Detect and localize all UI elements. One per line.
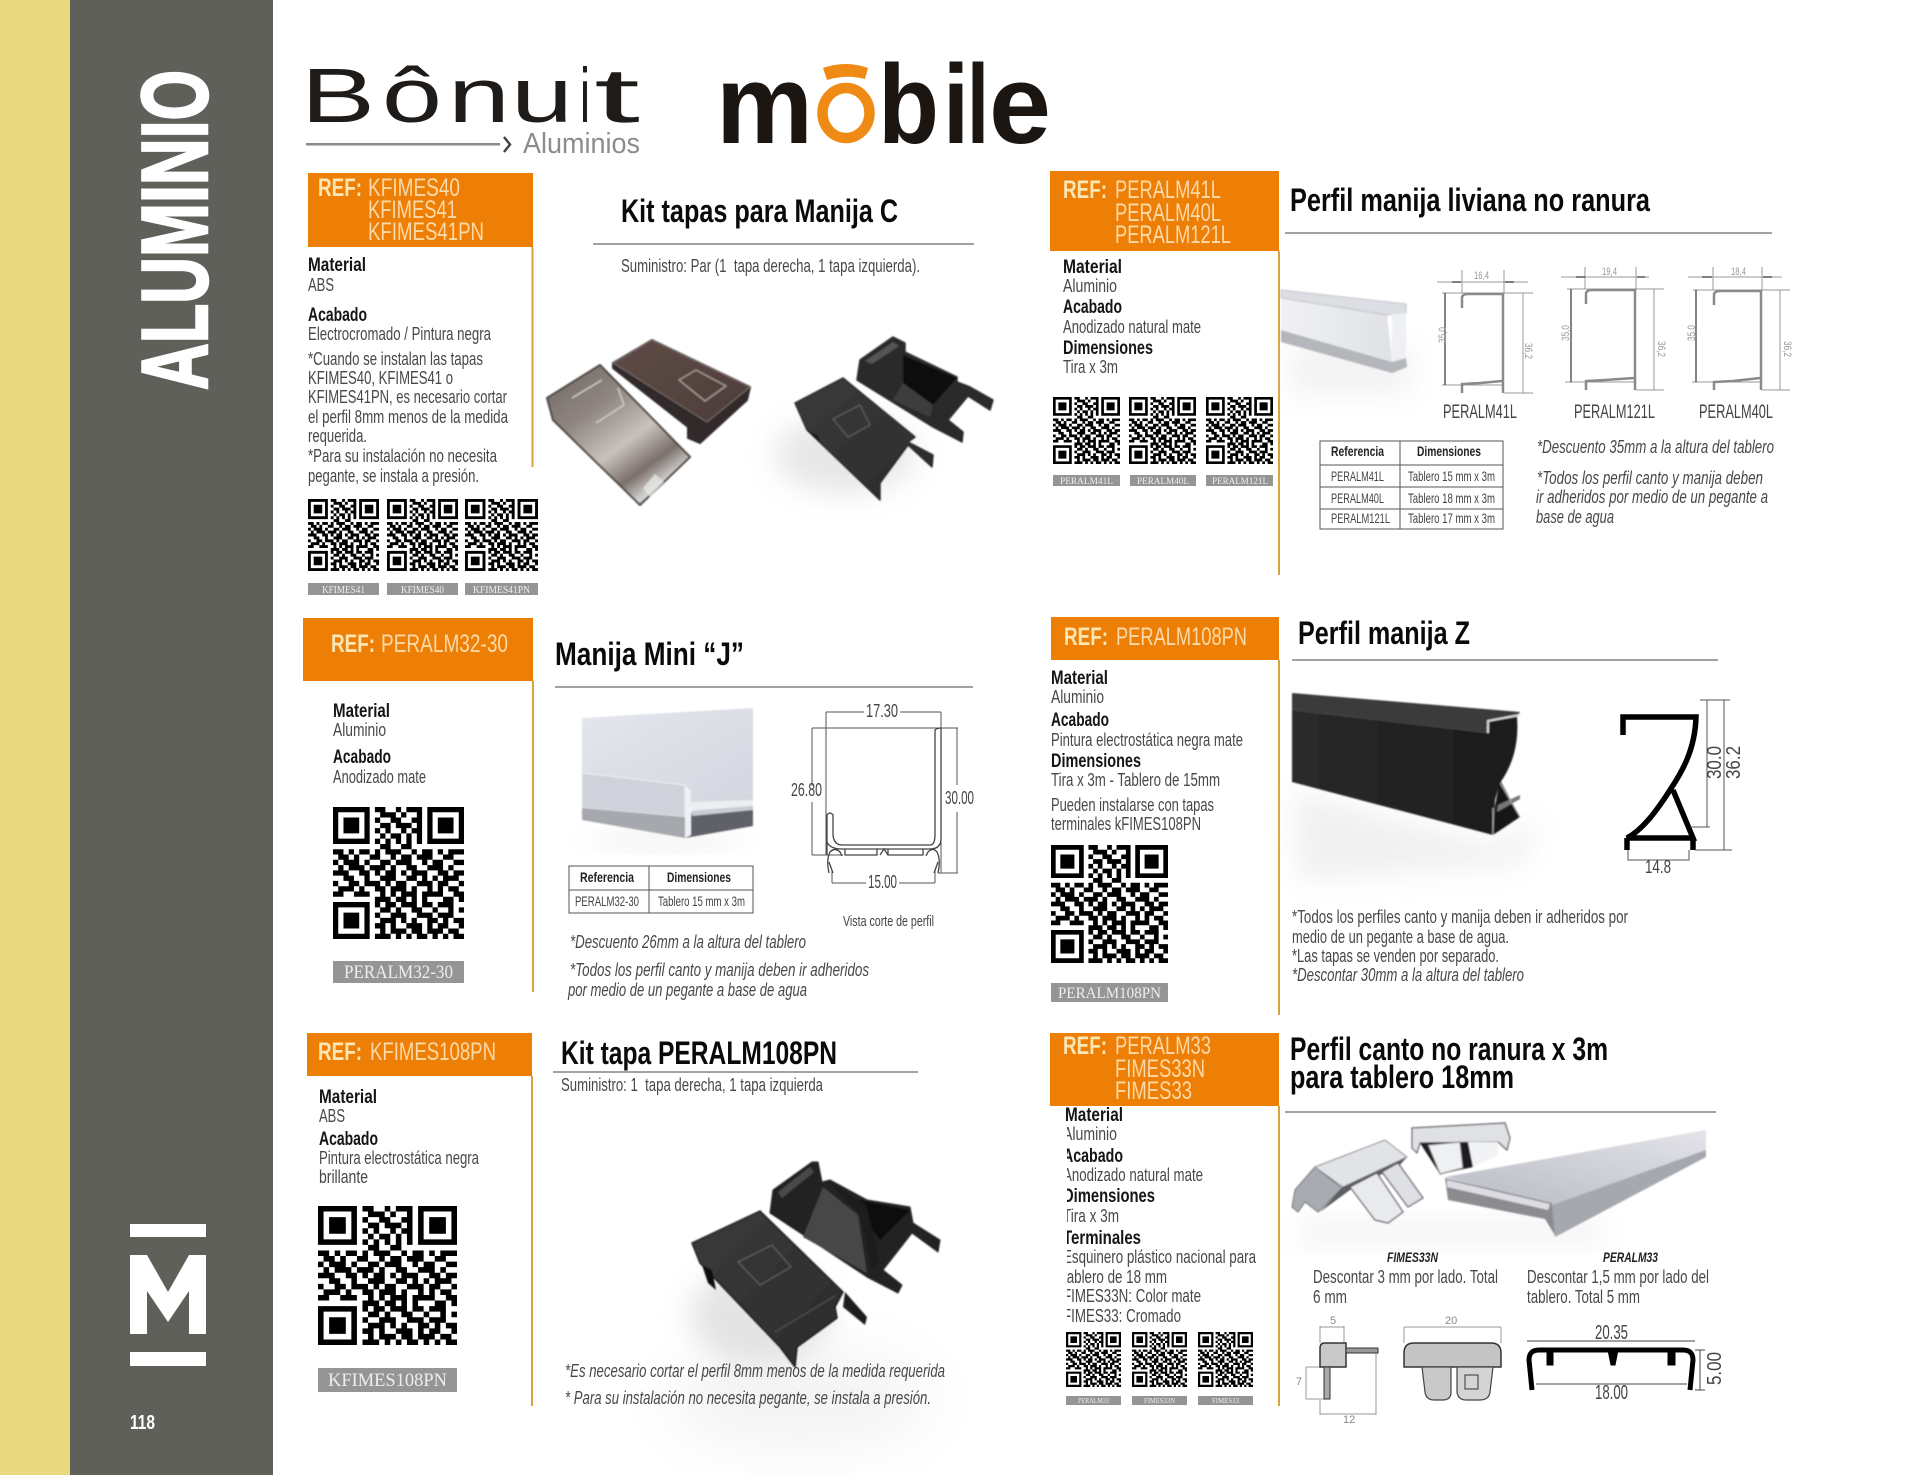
specifications: FIMES33: Cromado [1063, 1306, 1181, 1326]
installation notes: *Descuento 35mm a la altura del tablero [1537, 437, 1774, 457]
dimensions table: Dimensiones [667, 869, 731, 885]
supply note: Suministro: 1 tapa derecha, 1 tapa izquierda [561, 1075, 824, 1095]
terminal drawings: 12 [1343, 1414, 1355, 1426]
QR codes: PERALM33 [1078, 1397, 1109, 1405]
strip section drawing: 20.35 [1595, 1322, 1628, 1344]
title: para tablero 18mm [1290, 1059, 1514, 1095]
Z section drawing: 30.0 [1704, 746, 1726, 779]
title: Manija Mini “J” [555, 636, 744, 672]
specifications: *Para su instalación no necesita [308, 446, 498, 466]
terminal captions: Descontar 1,5 mm por lado del [1527, 1267, 1709, 1287]
installation notes: *Todos los perfiles canto y manija deben ir adheridos por [1292, 907, 1628, 927]
title: Kit tapas para Manija C [621, 193, 898, 229]
dimensions table: Dimensiones [1417, 443, 1481, 459]
product photo: black Z profile [1292, 693, 1540, 880]
specifications: terminales kFIMES108PN [1051, 814, 1201, 834]
reference header [1050, 1032, 1279, 1106]
panel: Kit tapas para Manija C [308, 173, 993, 596]
reference header: REF: [1063, 176, 1107, 204]
terminal drawings: 5 [1330, 1315, 1336, 1327]
specifications: KFIMES41PN, es necesario cortar [308, 387, 507, 407]
specifications: Terminales [1063, 1228, 1141, 1249]
reference header [1051, 617, 1279, 660]
panel: Manija Mini J [303, 618, 974, 1000]
installation notes: *Las tapas se venden por separado. [1292, 946, 1499, 966]
installation notes: *Descontar 30mm a la altura del tablero [1292, 965, 1524, 985]
specifications: *Cuando se instalan las tapas [308, 349, 483, 369]
dimensions table: Tablero 15 mm x 3m [1408, 468, 1495, 484]
specifications: FIMES33N: Color mate [1063, 1286, 1201, 1306]
dimensions table: PERALM40L [1331, 490, 1384, 506]
profile drawings: 36,2 [1781, 341, 1793, 357]
section drawing [791, 701, 974, 930]
profile drawings: 35,0 [1437, 327, 1449, 343]
QR codes: KFIMES40 [401, 585, 444, 596]
specifications: Dimensiones [1063, 1186, 1155, 1207]
dimensions table [1320, 441, 1503, 529]
strip section drawing [1527, 1322, 1726, 1404]
reference header: KFIMES41PN [368, 218, 484, 246]
logo: mobile [716, 42, 1051, 167]
installation notes: *Todos los perfil canto y manija deben ir adheridos [570, 960, 869, 980]
specifications: Material [333, 701, 390, 722]
specifications: Acabado [1051, 710, 1109, 731]
title [1290, 1031, 1608, 1095]
profile drawings: 18,4 [1731, 266, 1746, 278]
specifications: Acabado [319, 1129, 378, 1150]
specifications: Pintura electrostática negra mate [1051, 730, 1243, 750]
dimensions table: Referencia [1331, 443, 1384, 459]
reference header: REF: [1064, 623, 1108, 651]
specifications: Material [319, 1087, 377, 1108]
reference header: REF: [318, 1038, 362, 1066]
profile drawings: 35,0 [1560, 325, 1572, 341]
dimensions table: PERALM41L [1331, 468, 1384, 484]
dimensions table: Tablero 15 mm x 3m [658, 893, 745, 909]
specifications: ABS [319, 1106, 345, 1126]
terminal captions: Descontar 3 mm por lado. Total [1313, 1267, 1498, 1287]
title: Perfil manija liviana no ranura [1290, 182, 1650, 218]
section drawing: 17.30 [866, 701, 898, 721]
panel: Kit tapa PERALM108PN [307, 1033, 945, 1450]
reference header [303, 618, 533, 681]
logo: Bonuit Aluminios: t [594, 53, 640, 139]
reference header [307, 1033, 532, 1076]
product photo: caps and strip [1292, 1123, 1706, 1245]
specifications [1063, 257, 1201, 377]
logo: mobile: b [878, 42, 939, 167]
reference header [308, 173, 533, 247]
reference header: PERALM108PN [1116, 623, 1247, 651]
panel: Perfil manija Z [1051, 615, 1745, 1015]
section drawing: 26.80 [791, 780, 822, 800]
product photo: J profile [582, 708, 753, 848]
terminal captions: 6 mm [1313, 1287, 1347, 1307]
specifications [319, 1087, 480, 1187]
reference header: PERALM41L [1115, 176, 1221, 204]
specifications: Material [1051, 668, 1108, 689]
logo: mobile: i [943, 42, 969, 167]
specifications: ABS [308, 275, 334, 295]
specifications [333, 701, 426, 787]
QR codes: PERALM41L [1060, 476, 1113, 486]
installation notes [567, 932, 869, 1000]
section drawing: 30.00 [945, 788, 974, 808]
Z section drawing: 14.8 [1645, 857, 1671, 877]
panel: Perfil manija liviana no ranura [1050, 171, 1793, 575]
reference header: REF: [331, 630, 375, 658]
terminal captions: PERALM33 [1603, 1249, 1658, 1265]
QR codes [1053, 398, 1273, 486]
specifications: Acabado [1063, 1146, 1123, 1167]
drawing labels: PERALM40L [1699, 402, 1773, 423]
logo: mobile: m [716, 42, 813, 167]
specifications: Anodizado natural mate [1063, 317, 1201, 337]
installation notes [1536, 437, 1774, 527]
section drawing: Vista corte de perfil [843, 913, 934, 930]
reference header [1050, 171, 1279, 251]
reference header: KFIMES108PN [370, 1038, 496, 1066]
specifications: Aluminio [1051, 687, 1104, 707]
specifications: Acabado [333, 747, 391, 768]
drawing labels [1443, 402, 1773, 423]
dimensions table: PERALM32-30 [575, 893, 639, 909]
logo: mobile: e [989, 42, 1051, 167]
reference header: FIMES33N [1115, 1055, 1205, 1083]
terminal drawings: 20 [1445, 1315, 1457, 1327]
profile drawings: 36,2 [1655, 341, 1667, 357]
installation notes: base de agua [1536, 507, 1614, 527]
specifications: pegante, se instala a presión. [308, 466, 479, 486]
installation notes: *Es necesario cortar el perfil 8mm menos de la medida requerida [565, 1361, 945, 1381]
terminal captions: tablero. Total 5 mm [1527, 1287, 1640, 1307]
title: Perfil canto no ranura x 3m [1290, 1031, 1608, 1067]
installation notes: *Descuento 26mm a la altura del tablero [570, 932, 806, 952]
profile drawings: 16,4 [1474, 270, 1489, 282]
installation notes: ir adheridos por medio de un pegante a [1536, 487, 1768, 507]
drawing labels: PERALM121L [1574, 402, 1655, 423]
section drawing: 15.00 [868, 872, 897, 892]
profile drawings: 36,2 [1522, 343, 1534, 359]
QR codes: KFIMES41 [322, 585, 365, 596]
product photo: silver profile [1281, 290, 1410, 395]
yellow edge band [0, 0, 70, 1475]
reference header: REF: [1063, 1032, 1107, 1060]
Z section drawing [1623, 700, 1745, 877]
terminal drawings [1296, 1315, 1501, 1426]
QR codes: KFIMES41PN [473, 585, 530, 596]
specifications [1055, 1105, 1257, 1327]
specifications: Dimensiones [1051, 751, 1141, 772]
QR code [1051, 847, 1168, 1002]
logo: Bonuit Aluminios [301, 53, 640, 160]
specifications: Pueden instalarse con tapas [1051, 795, 1214, 815]
specifications: Tira x 3m - Tablero de 15mm [1051, 770, 1220, 790]
dimensions table: Referencia [580, 869, 634, 885]
terminal captions: FIMES33N [1387, 1249, 1439, 1265]
installation notes: por medio de un pegante a base de agua [567, 980, 807, 1000]
installation notes [1292, 907, 1628, 985]
logo: Bonuit Aluminios: u [511, 53, 573, 139]
specifications: Dimensiones [1063, 338, 1153, 359]
specifications: brillante [319, 1167, 368, 1187]
product photo: black caps [670, 1162, 940, 1450]
logo: Bonuit Aluminios: ô [382, 53, 442, 139]
specifications: Anodizado natural mate [1063, 1165, 1203, 1185]
dimensions table: Tablero 18 mm x 3m [1408, 490, 1495, 506]
specifications: Material [308, 255, 366, 276]
specifications: Aluminio [1063, 1124, 1117, 1144]
drawing labels: PERALM41L [1443, 402, 1517, 423]
QR code: PERALM32-30 [344, 962, 453, 983]
QR codes: PERALM40L [1137, 476, 1189, 486]
icon: M brand mark [130, 1224, 206, 1366]
specifications: Tira x 3m [1063, 1206, 1119, 1226]
terminal drawings: 7 [1296, 1376, 1302, 1388]
specifications: el perfil 8mm menos de la medida [308, 407, 509, 427]
QR code [333, 810, 464, 983]
QR codes: FIMES33N [1144, 1397, 1175, 1405]
specifications: requerida. [308, 426, 367, 446]
reference header: FIMES33 [1115, 1077, 1192, 1105]
specifications: Material [1065, 1105, 1123, 1126]
specifications [308, 255, 509, 486]
QR code: KFIMES108PN [328, 1370, 447, 1391]
specifications: Aluminio [1063, 276, 1117, 296]
reference header: KFIMES41 [368, 196, 457, 224]
specifications: Esquinero plástico nacional para [1063, 1247, 1257, 1267]
specifications: Acabado [308, 305, 367, 326]
reference header: PERALM32-30 [381, 630, 508, 658]
panel: Perfil canto no ranura [1050, 1031, 1726, 1426]
Z section drawing: 36.2 [1723, 746, 1745, 779]
product photo: bronze and black caps [547, 337, 993, 505]
installation notes [565, 1361, 945, 1408]
reference header: PERALM121L [1115, 221, 1231, 249]
title: Perfil manija Z [1298, 615, 1470, 651]
specifications: Tira x 3m [1063, 357, 1118, 377]
supply note: Suministro: Par (1 tapa derecha, 1 tapa izquierda). [621, 256, 920, 276]
strip section drawing: 18.00 [1595, 1382, 1628, 1404]
profile drawings: 19,4 [1602, 266, 1617, 278]
dimensions table: Tablero 17 mm x 3m [1408, 510, 1495, 526]
reference header: PERALM33 [1115, 1032, 1211, 1060]
profile drawings: 35,0 [1686, 325, 1698, 341]
strip section drawing: 5.00 [1704, 1352, 1726, 1385]
dimensions table [569, 866, 753, 913]
installation notes: * Para su instalación no necesita pegante, se instala a presión. [565, 1388, 931, 1408]
specifications: KFIMES40, KFIMES41 o [308, 368, 453, 388]
logo: Bonuit Aluminios: B [301, 53, 375, 139]
installation notes: *Todos los perfil canto y manija deben [1537, 468, 1763, 488]
QR codes: PERALM121L [1212, 476, 1268, 486]
specifications: Aluminio [333, 720, 386, 740]
reference header: REF: [318, 174, 362, 202]
QR code: PERALM108PN [1058, 985, 1161, 1002]
QR codes [308, 500, 538, 596]
dimensions table: PERALM121L [1331, 510, 1390, 526]
logo: mobile: l [967, 42, 989, 167]
logo: Bonuit Aluminios: Aluminios [523, 128, 640, 160]
specifications: Material [1063, 257, 1122, 278]
specifications: Acabado [1063, 297, 1122, 318]
reference header: PERALM40L [1115, 199, 1221, 227]
profile drawings [1437, 266, 1793, 393]
specifications: Anodizado mate [333, 767, 426, 787]
page number: 118 [130, 1412, 155, 1434]
terminal captions [1313, 1249, 1709, 1307]
grey sidebar [70, 0, 273, 1475]
specifications [1051, 668, 1243, 834]
specifications: Pintura electrostática negra [319, 1148, 480, 1168]
specifications: tablero de 18 mm [1063, 1267, 1167, 1287]
QR codes: FIMES33 [1212, 1397, 1239, 1405]
logo: Bonuit Aluminios: n [448, 53, 510, 139]
title: Kit tapa PERALM108PN [561, 1035, 837, 1071]
installation notes: medio de un pegante a base de agua. [1292, 927, 1509, 947]
logo: Bonuit Aluminios: i [580, 53, 590, 139]
reference header: KFIMES40 [368, 174, 460, 202]
QR code [318, 1209, 457, 1392]
specifications: Electrocromado / Pintura negra [308, 324, 492, 344]
QR codes [1066, 1333, 1253, 1405]
